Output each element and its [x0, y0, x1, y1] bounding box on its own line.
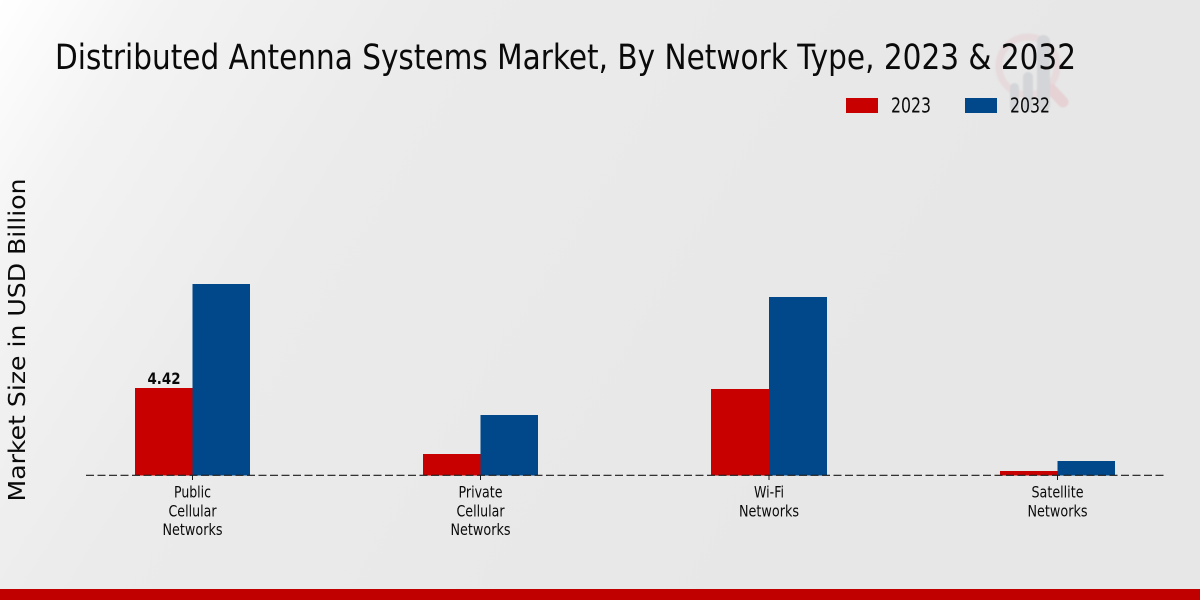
- baseline: [86, 474, 1164, 476]
- axis label: public cellular networks: Networks: [162, 520, 222, 539]
- legend swatch 2032: [965, 98, 997, 113]
- bars: satellite networks: [1000, 461, 1115, 476]
- bars: wi-fi networks: [711, 297, 827, 476]
- axis label: public cellular networks: [162, 483, 222, 539]
- watermark logo: [999, 35, 1063, 112]
- value label 4.42: 4.42: [148, 369, 180, 388]
- bars: private cellular networks: [423, 415, 538, 476]
- axis label: wi-fi networks: [739, 483, 799, 520]
- legend label 2032: 2032: [1010, 94, 1050, 118]
- legend label 2023: 2023: [891, 94, 931, 118]
- axis label: satellite networks: [1028, 483, 1088, 520]
- axis label: wi-fi networks: Networks: [739, 502, 799, 520]
- axis label: private cellular networks: Networks: [450, 520, 510, 539]
- bar chart: [86, 284, 1164, 480]
- axis label: private cellular networks: Private: [458, 483, 502, 502]
- legend swatch 2023: [846, 98, 878, 113]
- legend: [846, 94, 1050, 118]
- axis label: wi-fi networks: Wi-Fi: [754, 483, 784, 502]
- footer bar: [0, 589, 1200, 600]
- axis label: public cellular networks: Cellular: [168, 502, 217, 520]
- axis label: satellite networks: Networks: [1028, 502, 1088, 520]
- axis label: private cellular networks: [450, 483, 510, 539]
- axis label: public cellular networks: Public: [174, 483, 211, 502]
- y axis label: Market Size in USD Billion: [3, 179, 31, 501]
- axis label: private cellular networks: Cellular: [456, 502, 505, 520]
- axis label: satellite networks: Satellite: [1032, 483, 1084, 502]
- bars: public cellular networks: [135, 284, 250, 476]
